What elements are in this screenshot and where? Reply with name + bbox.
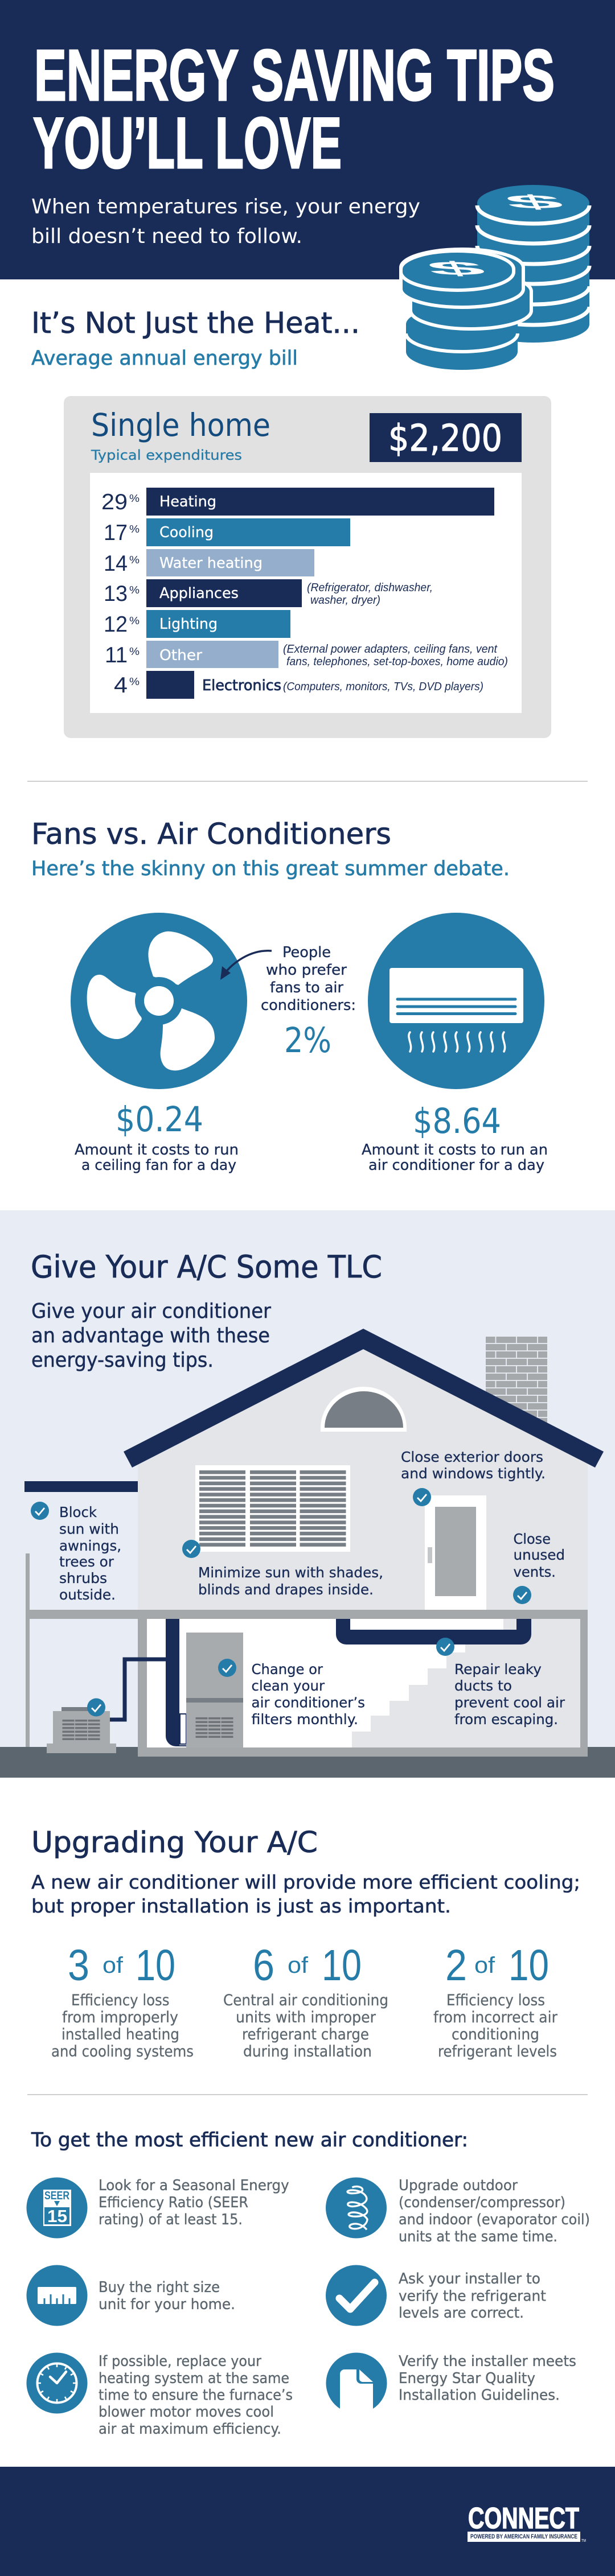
icon: check mark [326,2265,387,2326]
tip: right size [26,2265,235,2326]
bar: water heating: % [129,554,140,566]
total amount box: $2,200 [388,418,502,460]
tip: block sun: shrubs [59,1570,107,1586]
bar: appliances: Appliances [159,585,239,602]
tip: filters: Change or [252,1661,323,1678]
stat: 2 of 10: 10 [509,1941,549,1990]
tip: replace heating system: air at maximum efficiency. [99,2421,281,2438]
subheading: summer debate: Here’s the skinny on this great summer debate. [31,858,510,880]
stat: 3 of 10: and cooling systems [51,2043,194,2060]
outdoor condenser unit [47,1707,116,1753]
bar: cooling: % [129,524,140,535]
tip: energy star guidelines: Energy Star Quality [399,2370,535,2387]
tip: minimize sun: Minimize sun with shades, [198,1564,383,1581]
tip: close doors [401,1449,546,1506]
stat: 6 of 10: of [288,1953,309,1978]
tip: minimize sun: blinds and drapes inside. [198,1581,374,1598]
ducts [336,1619,531,1644]
subtitle: When temperatures rise, your energy [31,195,420,219]
tip: repair ducts [436,1638,565,1728]
stat: 3 of 10: 3 [68,1941,89,1990]
door [425,1495,486,1610]
callout: people who prefer fans: People [282,944,331,961]
footer [0,2467,615,2576]
tip: verify refrigerant [326,2265,546,2326]
panel heading: Single home [91,407,270,443]
tip: verify refrigerant: levels are correct. [399,2305,524,2322]
bar: lighting: % [129,615,140,627]
stat: air conditioner cost: $8.64 [413,1101,501,1141]
tip: filters [218,1659,365,1728]
tip: upgrade both units: (condenser/compressor) [399,2194,565,2211]
bar: appliances: % [129,584,140,596]
check: outdoor unit [87,1698,105,1716]
icon: document [326,2352,387,2416]
furnace [186,1633,243,1747]
arrow: to fan [220,951,272,980]
bar: appliances: washer, dryer) [310,594,380,607]
tip: replace heating system: blower motor moves cool [99,2404,274,2421]
heading: fans vs air conditioners: Fans vs. Air Conditioners [31,818,391,851]
icon: ruler [26,2265,88,2326]
panel: single home [64,396,551,738]
bar: cooling [104,518,350,546]
tip: repair ducts: ducts to [454,1678,512,1694]
bar: cooling: 17 [104,521,128,545]
stat: 6 of 10: Central air conditioning [223,1992,388,2009]
callout: people who prefer fans: fans to air [270,979,343,996]
house illustration [24,1329,604,1757]
callout: people who prefer fans: who prefer [266,962,347,979]
tip: close vents [513,1531,565,1604]
title: YOU’LL LOVE [33,102,342,183]
front coin stack [401,249,531,370]
intro: upgrading [31,1871,580,1917]
bar: other: Other [159,647,202,664]
bar: other: fans, telephones, set-top-boxes, home audio) [286,656,508,668]
front coin stack: $ [422,258,490,279]
subtitle [31,195,420,248]
tip: block sun: awnings, [59,1538,121,1554]
bar: lighting: 12 [104,612,128,637]
tip: upgrade both units: Upgrade outdoor [399,2177,518,2194]
tip: right size: unit for your home. [99,2296,235,2313]
tip: filters: filters monthly. [252,1711,358,1728]
stat: 2 of 10: refrigerant levels [438,2043,557,2060]
tip: block sun: Block [59,1504,97,1520]
stat: 2%: 2% [284,1020,331,1061]
stat: 6 of 10: during installation [243,2043,372,2060]
bar: electronics: Electronics [202,677,281,694]
subtitle: bill doesn’t need to follow. [31,225,302,248]
intro: upgrading: A new air conditioner will provide more efficient cooling; [31,1871,580,1893]
stat: 6 of 10: refrigerant charge [242,2026,369,2043]
roof [124,1329,604,1468]
bar: lighting: Lighting [159,616,218,633]
tip: block sun [31,1502,121,1603]
bar: appliances: (Refrigerator, dishwasher, [307,582,433,594]
icon: coil [326,2177,387,2239]
tip: verify refrigerant: verify the refrigerant [399,2288,546,2305]
tip: energy star guidelines [326,2352,576,2416]
stat: 3 of 10: from improperly [62,2009,178,2026]
stat: 6 of 10: 6 [253,1941,274,1990]
logo: connect: POWERED BY AMERICAN FAMILY INSURANCE [470,2533,577,2540]
post [26,1553,30,1747]
stat: air conditioner cost [362,1101,548,1174]
bar: electronics: (Computers, monitors, TVs, DVD players) [283,681,483,693]
stat: 2 of 10: Efficiency loss [446,1992,545,2009]
bar: other: (External power adapters, ceiling fans, vent [283,643,498,656]
bar: heating: Heating [159,493,216,510]
tip: minimize sun [182,1540,383,1598]
bar: electronics [114,671,483,699]
stat: fan cost [75,1099,239,1174]
bar: lighting [104,610,290,638]
tip: upgrade both units: units at the same time. [399,2228,557,2245]
back coin stack: $ [500,191,568,212]
tip: block sun: sun with [59,1520,119,1538]
bar: other [105,641,508,668]
stat: 6 of 10: 10 [322,1941,362,1990]
tip: filters: clean your [252,1678,325,1694]
tip: upgrade both units: and indoor (evaporator coil) [399,2211,590,2228]
panel: give your AC some TLC [0,1210,615,1778]
bar: electronics: 4 [114,673,128,698]
heading: upgrading your AC: Upgrading Your A/C [31,1826,318,1860]
stat: 2 of 10: 2 [445,1941,467,1990]
stat: air conditioner cost: Amount it costs to run an [362,1141,548,1159]
stat: 2 of 10: of [474,1953,495,1978]
bar: heating: 29 [101,490,128,514]
section intro: energy-saving tips. [31,1349,214,1372]
logo: connect: CONNECT [468,2502,579,2535]
tip: filters: air conditioner’s [252,1695,365,1711]
bar: heating: % [129,493,140,504]
refrigerant line [110,1659,166,1720]
tip: right size: Buy the right size [99,2279,220,2296]
bar chart [90,473,522,713]
bar: heating [101,488,494,516]
intro: upgrading: but proper installation is just as important. [31,1895,451,1917]
tip: verify refrigerant: Ask your installer to [399,2270,540,2288]
shuttered window [195,1465,350,1552]
tip: close doors: Close exterior doors [401,1449,543,1465]
callout: people who prefer fans [261,944,356,1014]
title [33,35,555,183]
stat: 2 of 10 [433,1941,558,2060]
bar: cooling: Cooling [159,524,214,541]
chimney [486,1337,547,1428]
tip: close vents: Close [514,1531,551,1547]
icon: ceiling fan [71,913,247,1089]
logo: connect: TM [581,2539,586,2543]
icon: SEER label: 15 [47,2206,67,2226]
stat: air conditioner cost: air conditioner for a day [368,1157,544,1174]
stat: 3 of 10: Efficiency loss [71,1992,170,2009]
section intro: Give your air conditioner [31,1300,271,1323]
callout: people who prefer fans: conditioners: [261,997,356,1014]
stat: 2 of 10: from incorrect air [433,2009,558,2026]
stat: 3 of 10: installed heating [62,2026,179,2043]
stat: fan cost: Amount it costs to run [75,1141,239,1159]
section intro: an advantage with these [31,1324,270,1347]
bar: water heating: 14 [104,551,128,576]
stat: 6 of 10: units with improper [236,2009,376,2026]
icon: clock [26,2352,88,2414]
tip: block sun: trees or [59,1553,114,1570]
tip: replace heating system: If possible, replace your [99,2353,261,2370]
tip: energy star guidelines: Installation Guidelines. [399,2387,560,2404]
bar: electronics: % [129,676,140,687]
tip: SEER rating: Look for a Seasonal Energy [99,2177,289,2194]
floor [26,1610,588,1619]
icon: coin stacks [401,185,589,370]
bar: water heating: Water heating [159,555,263,572]
section intro [31,1300,271,1372]
heading: not just the heat: It’s Not Just the Heat... [31,307,360,340]
house wall [138,1349,588,1610]
stat: 3 of 10: of [102,1953,124,1978]
logo: connect [468,2502,586,2543]
icon: air conditioner [368,913,544,1089]
bar: other: 11 [105,643,128,667]
tip: repair ducts: Repair leaky [454,1661,542,1678]
stat: fan cost: $0.24 [116,1099,203,1140]
vertical duct [166,1619,186,1746]
tip: repair ducts: prevent cool air [454,1695,565,1711]
tip: replace heating system: heating system at the same [99,2370,289,2387]
section heading: Give Your A/C Some TLC [31,1249,382,1285]
tip: SEER rating: Efficiency Ratio (SEER [99,2194,248,2211]
awning [24,1481,138,1492]
tip: replace heating system [26,2352,293,2438]
tip: energy star guidelines: Verify the installer meets [399,2353,576,2370]
header banner [0,0,615,279]
tip: close doors: and windows tightly. [401,1465,546,1482]
bar: appliances: 13 [104,582,128,606]
stat: fan cost: a ceiling fan for a day [81,1157,236,1174]
tip: replace heating system: time to ensure the furnace’s [99,2387,293,2404]
bar: appliances [104,579,433,607]
attic window [321,1387,407,1432]
icon: SEER label: SEER [44,2190,69,2202]
tip: SEER rating [26,2177,289,2239]
basement [138,1619,588,1757]
bar: other: % [129,646,140,657]
back coin stack [477,185,589,343]
tip: SEER rating: rating) of at least 15. [99,2211,243,2228]
tip: upgrade both units [326,2177,590,2245]
stat: 3 of 10: 10 [136,1941,175,1990]
tip: close vents: vents. [514,1564,556,1580]
tip: close vents: unused [514,1547,565,1563]
bar: water heating [104,549,314,576]
tip: block sun: outside. [59,1586,116,1603]
panel subheading: Typical expenditures [91,447,242,463]
heading: most efficient new air conditioner: To get the most efficient new air conditioner: [31,2129,468,2152]
stat: 2 of 10: conditioning [452,2026,539,2043]
stat: 3 of 10 [51,1941,194,2060]
stat: 6 of 10 [223,1941,388,2060]
subheading: average annual energy bill: Average annual energy bill [31,347,298,370]
tip: repair ducts: from escaping. [454,1711,558,1728]
icon: SEER label [26,2177,88,2239]
